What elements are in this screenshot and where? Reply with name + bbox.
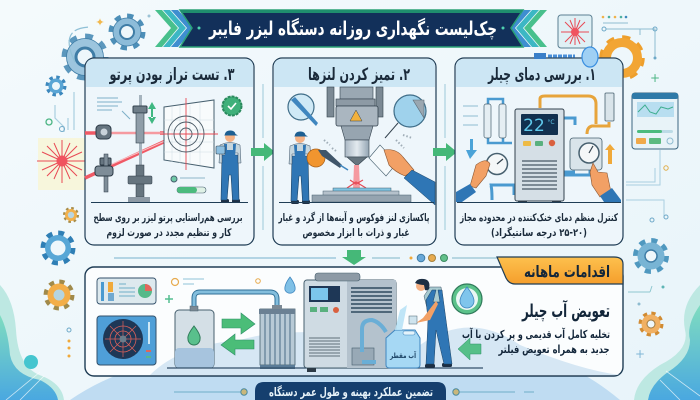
footer banner xyxy=(174,382,534,400)
caption xyxy=(459,212,619,239)
icon: water drop badge xyxy=(452,284,482,314)
pipe xyxy=(194,292,277,306)
filter xyxy=(259,305,295,369)
left hand with gauge xyxy=(456,154,508,202)
title banner xyxy=(155,10,547,47)
worker xyxy=(219,130,241,203)
icon: fan unit xyxy=(97,316,156,365)
caption: کنترل منظم دمای خنک‌کننده در محدوده مجاز xyxy=(459,212,619,224)
worker with blower xyxy=(289,131,311,204)
chiller illustration xyxy=(456,93,621,203)
dashboard icon right xyxy=(632,93,678,149)
decorative right side: + xyxy=(650,71,660,85)
arrow: 3 to 2 xyxy=(251,84,275,230)
hand with cloth xyxy=(369,145,435,205)
decorative gears left xyxy=(44,14,336,358)
heading: ۳. تست تراز بودن پرتو xyxy=(109,65,235,85)
right chevrons xyxy=(508,10,547,47)
worker pouring xyxy=(409,279,452,368)
decorative gears left: ✦ xyxy=(95,16,105,29)
caption: غبار و ذرات با ابزار مخصوص xyxy=(302,227,410,239)
caption xyxy=(278,211,430,239)
panel: 2 lens cleaning xyxy=(273,58,436,245)
arrow: 2 to 1 xyxy=(433,84,457,230)
decor: circles xyxy=(165,277,295,303)
arrows: circulation xyxy=(221,313,255,355)
caption: (۲۵-۲۰ درجه سانتیگراد) xyxy=(491,226,587,239)
caption xyxy=(94,212,243,239)
right hand pointing xyxy=(590,163,621,202)
panel: 3 beam alignment xyxy=(85,58,254,245)
divider with dots xyxy=(342,250,497,265)
heading: ۲. تمیز کردن لنزها xyxy=(308,65,410,85)
panel: 1 chiller temperature xyxy=(455,47,623,245)
chiller machine xyxy=(304,273,396,372)
description xyxy=(462,327,610,356)
magnifier right xyxy=(385,95,426,138)
heading: ۱. بررسی دمای چیلر xyxy=(487,65,596,85)
chiller illustration: °C xyxy=(547,119,555,126)
footer banner: تضمین عملکرد بهینه و طول عمر دستگاه xyxy=(269,385,433,400)
magnifier left xyxy=(288,94,318,126)
icon: status card xyxy=(97,278,156,304)
hose xyxy=(362,320,386,362)
chiller illustration: 22 xyxy=(523,116,545,136)
description: جدید به همراه تعویض فیلتر xyxy=(498,343,610,356)
floor line xyxy=(167,367,483,369)
decorative right side: + xyxy=(635,347,645,361)
caption: کار و تنظیم مجدد در صورت لزوم xyxy=(106,227,232,239)
laser head illustration xyxy=(312,87,412,202)
description: تخلیه کامل آب قدیمی و پر کردن با آب xyxy=(462,327,610,341)
panel: monthly actions xyxy=(85,257,623,376)
arrow: left xyxy=(458,338,481,360)
water jug: آب مقطر xyxy=(389,351,416,360)
caption: بررسی هم‌راستایی پرتو لیزر بر روی سطح xyxy=(94,212,243,224)
orange tab xyxy=(497,257,623,284)
tank xyxy=(175,306,214,368)
water jug xyxy=(386,305,420,368)
title text: چک‌لیست نگهداری روزانه دستگاه لیزر فایبر xyxy=(208,17,497,40)
orange tab: اقدامات ماهانه xyxy=(524,262,610,281)
caption: پاکسازی لنز فوکوس و آینه‌ها از گرد و غبار xyxy=(278,211,430,224)
left chevrons xyxy=(155,10,194,47)
laser burst icon left xyxy=(37,138,85,190)
heading: chiller water change: تعویض آب چیلر xyxy=(521,299,610,322)
watermark logo xyxy=(534,47,598,67)
beam alignment illustration xyxy=(85,95,242,203)
